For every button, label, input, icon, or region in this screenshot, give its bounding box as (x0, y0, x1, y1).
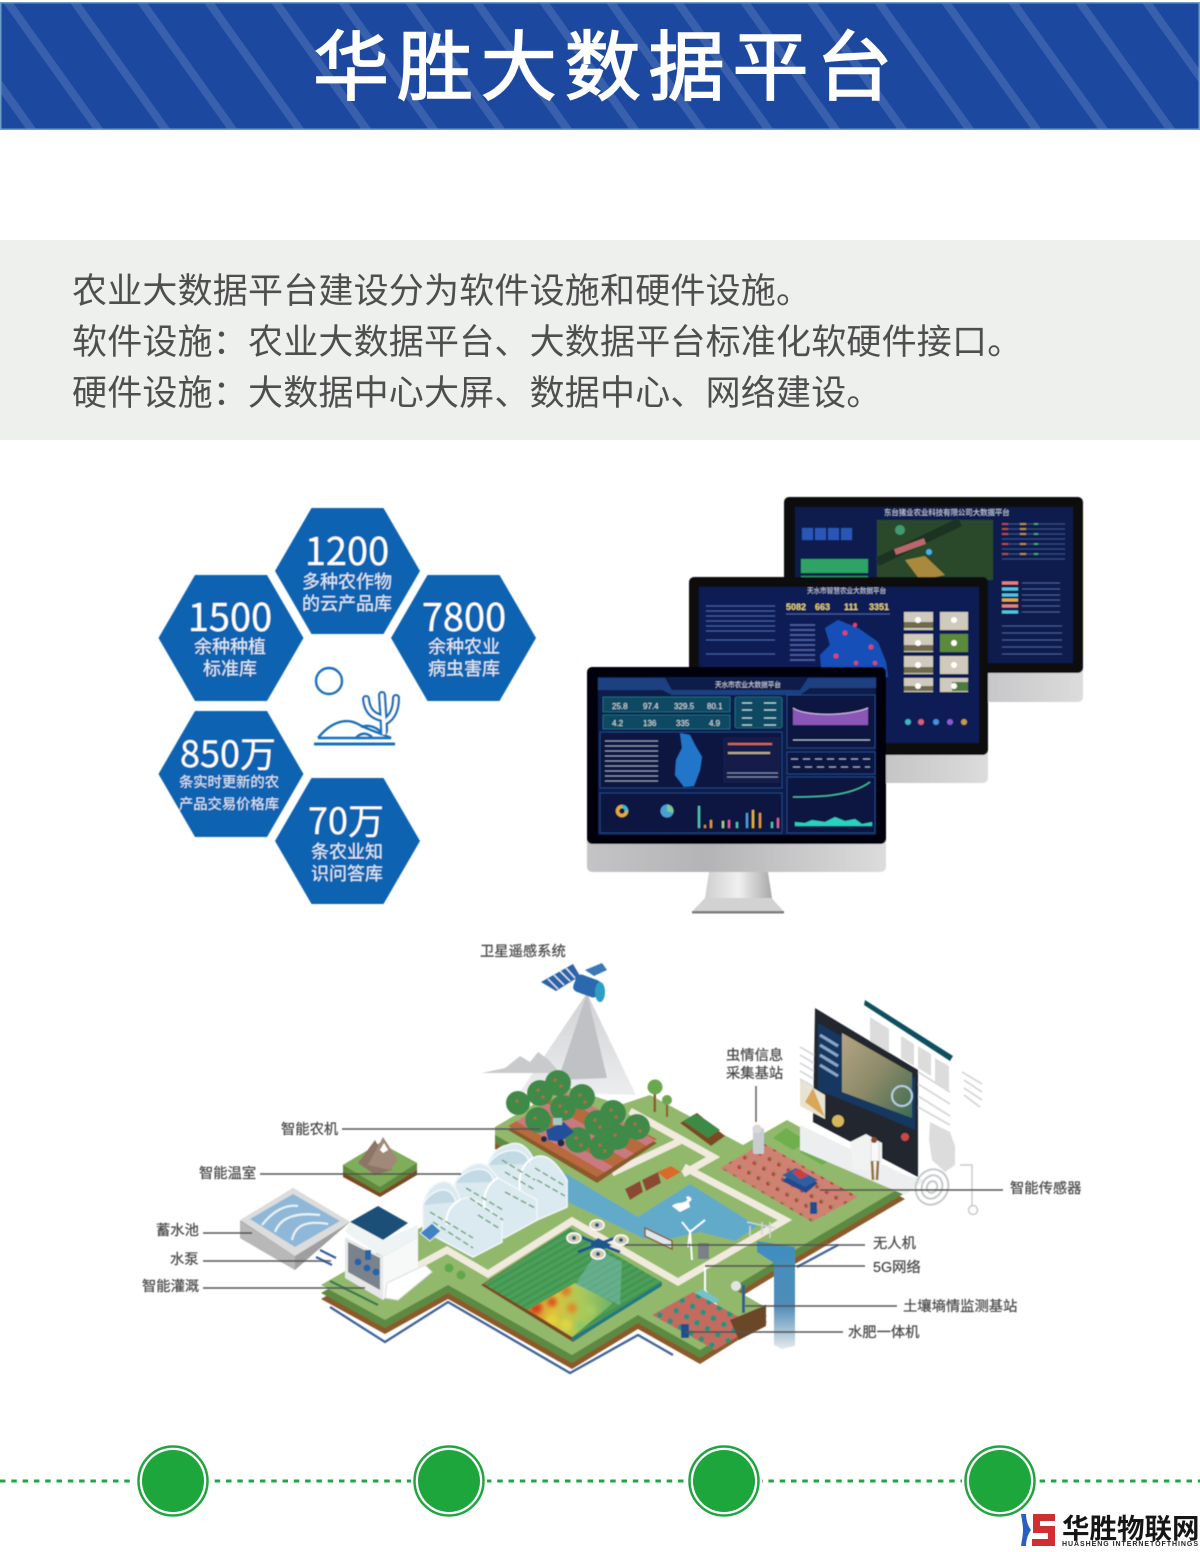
label: smart irrigation: 智能灌溉 (142, 1278, 199, 1295)
hexagon: 850万 price library: 条实时更新的农 (179, 771, 279, 792)
monitor: front, big data dashboard: 25.8 (612, 702, 628, 711)
pond decoration and windmill (645, 1197, 775, 1260)
smart tractor (541, 1118, 574, 1146)
intro line 1: 农业大数据平台建设分为软件设施和硬件设施。 (72, 263, 811, 314)
hexagon: 1500 planting standards: 标准库 (203, 655, 257, 681)
dashboard monitors (587, 497, 1083, 914)
intro line 3: 硬件设施：大数据中心大屏、数据中心、网络建设。 (72, 365, 882, 416)
icon: satellite (541, 963, 607, 1002)
hexagon statistics cluster (158, 508, 536, 904)
monitor stand (692, 872, 784, 914)
bushes (444, 1264, 466, 1280)
hexagon: 1200 crop cloud library: 1200 (305, 521, 389, 576)
label: smart machinery: 智能农机 (281, 1121, 338, 1138)
timeline node 4 (962, 1443, 1038, 1519)
5G tower and lower plot (652, 1265, 766, 1350)
monitor: front, big data dashboard: 329.5 (674, 702, 695, 711)
intro line 2: 软件设施：农业大数据平台、大数据平台标准化软硬件接口。 (72, 314, 1022, 365)
monitor: front, big data dashboard: 335 (676, 719, 690, 728)
monitor: front, big data dashboard: 4.2 (612, 719, 624, 728)
logo mark (1021, 1514, 1055, 1546)
hexagon: 1200 crop cloud library: 多种农作物 (302, 568, 392, 594)
logo Chinese name: 华胜物联网 (1062, 1506, 1200, 1546)
isometric smart farm illustration (240, 963, 982, 1373)
label: pest station (726, 1047, 783, 1082)
label: satellite: 卫星遥感系统 (480, 943, 566, 960)
hexagon: 1500 planting standards: 1500 (188, 587, 272, 642)
monitor: back, farm map dashboard (784, 497, 1083, 702)
hexagon: 70万 knowledge library: 识问答库 (311, 860, 383, 886)
title text: 华胜大数据平台 (313, 6, 900, 116)
timeline node 1 (135, 1443, 211, 1519)
monitor: back, farm map dashboard: 东台猪业农业科技有限公司大数据平台 (884, 507, 1010, 518)
big data screen with floating panels (800, 1000, 982, 1214)
hexagon: 7800 pest library: 余种农业 (428, 633, 500, 659)
label: reservoir: 蓄水池 (156, 1222, 199, 1239)
timeline node 3 (686, 1443, 762, 1519)
smart sensor box (782, 1168, 818, 1193)
hexagon: 7800 pest library: 7800 (422, 587, 506, 642)
platform ground layers (321, 1086, 905, 1369)
panel: introduction (0, 240, 1200, 440)
small mountain island (343, 1137, 417, 1197)
label: water pump: 水泵 (170, 1251, 199, 1268)
hexagon: 70万 knowledge library: 70万 (308, 793, 384, 845)
label: soil moisture station: 土壤墒情监测基站 (903, 1297, 1017, 1315)
reservoir pool (240, 1188, 350, 1270)
roads (410, 1111, 785, 1282)
farm labels (142, 943, 1081, 1341)
label: pest station: 虫情信息 (726, 1047, 783, 1064)
leader lines (203, 1086, 1003, 1332)
monitor: front, big data dashboard: 80.1 (707, 702, 723, 711)
icon: sun and cactus (314, 668, 396, 744)
solar panels (420, 1223, 441, 1241)
hexagon: 7800 pest library: 病虫害库 (428, 655, 500, 681)
crop field with heat map (481, 1228, 662, 1342)
hexagon: 1500 planting standards: 余种种植 (194, 633, 266, 659)
label: smart greenhouse: 智能温室 (199, 1165, 256, 1182)
company logo (1021, 1506, 1200, 1548)
drone (567, 1220, 628, 1259)
title banner (0, 2, 1200, 130)
waterfall (757, 1241, 795, 1349)
monitor: middle, regional map dashboard: 111 (844, 602, 858, 612)
monitor: middle, regional map dashboard: 天水市智慧农业大数据平台 (807, 585, 887, 595)
right red field with plants (720, 1124, 858, 1222)
label: pest station: 采集基站 (726, 1065, 783, 1082)
hexagon: 850万 price library: 产品交易价格库 (179, 793, 279, 814)
footer timeline (0, 1443, 1200, 1519)
hexagon: 1200 crop cloud library (275, 508, 420, 634)
timeline node 2 (411, 1443, 487, 1519)
hexagon: 7800 pest library (391, 575, 536, 701)
icon: satellite cone and mountains (482, 963, 636, 1095)
label: fertigation machine: 水肥一体机 (848, 1324, 919, 1341)
operator figure (871, 1137, 879, 1180)
monitor: front, big data dashboard: 97.4 (643, 702, 659, 711)
concentric sensor rings (910, 1164, 954, 1210)
hexagon: 70万 knowledge library (275, 778, 420, 904)
gray hexagonal panel (929, 1122, 955, 1172)
label: 5G network: 5G网络 (873, 1259, 921, 1276)
river and pond (528, 1153, 757, 1241)
hexagon: 1200 crop cloud library: 的云产品库 (302, 590, 392, 616)
pump house building (316, 1206, 432, 1305)
monitor: front, big data dashboard: 4.9 (709, 719, 721, 728)
hexagon: 70万 knowledge library: 条农业知 (311, 838, 383, 864)
platform outline beneath ground (330, 1245, 838, 1373)
orchard plot with trees (506, 1070, 657, 1183)
hexagon: 850万 price library: 850万 (180, 726, 276, 778)
monitor: front, big data dashboard: 天水市农业大数据平台 (715, 679, 781, 689)
hexagon: 850万 price library (158, 711, 304, 837)
logo English name: HUASHENG INTERNETOFTHINGS (1062, 1541, 1198, 1548)
small trees and planting box (625, 1080, 725, 1200)
label: smart sensor: 智能传感器 (1010, 1180, 1081, 1197)
monitor: front, big data dashboard (587, 667, 886, 914)
monitor: front, big data dashboard: 136 (643, 719, 657, 728)
monitor: middle, regional map dashboard: 3351 (869, 602, 889, 612)
label: drone: 无人机 (873, 1235, 916, 1252)
monitor: middle, regional map dashboard: 663 (815, 602, 830, 612)
greenhouses (423, 1143, 567, 1257)
monitor: middle, regional map dashboard: 5082 (786, 602, 806, 612)
pest information station (752, 1124, 764, 1154)
monitor: middle, regional map dashboard (689, 577, 988, 783)
hexagon: 1500 planting standards (158, 575, 304, 701)
